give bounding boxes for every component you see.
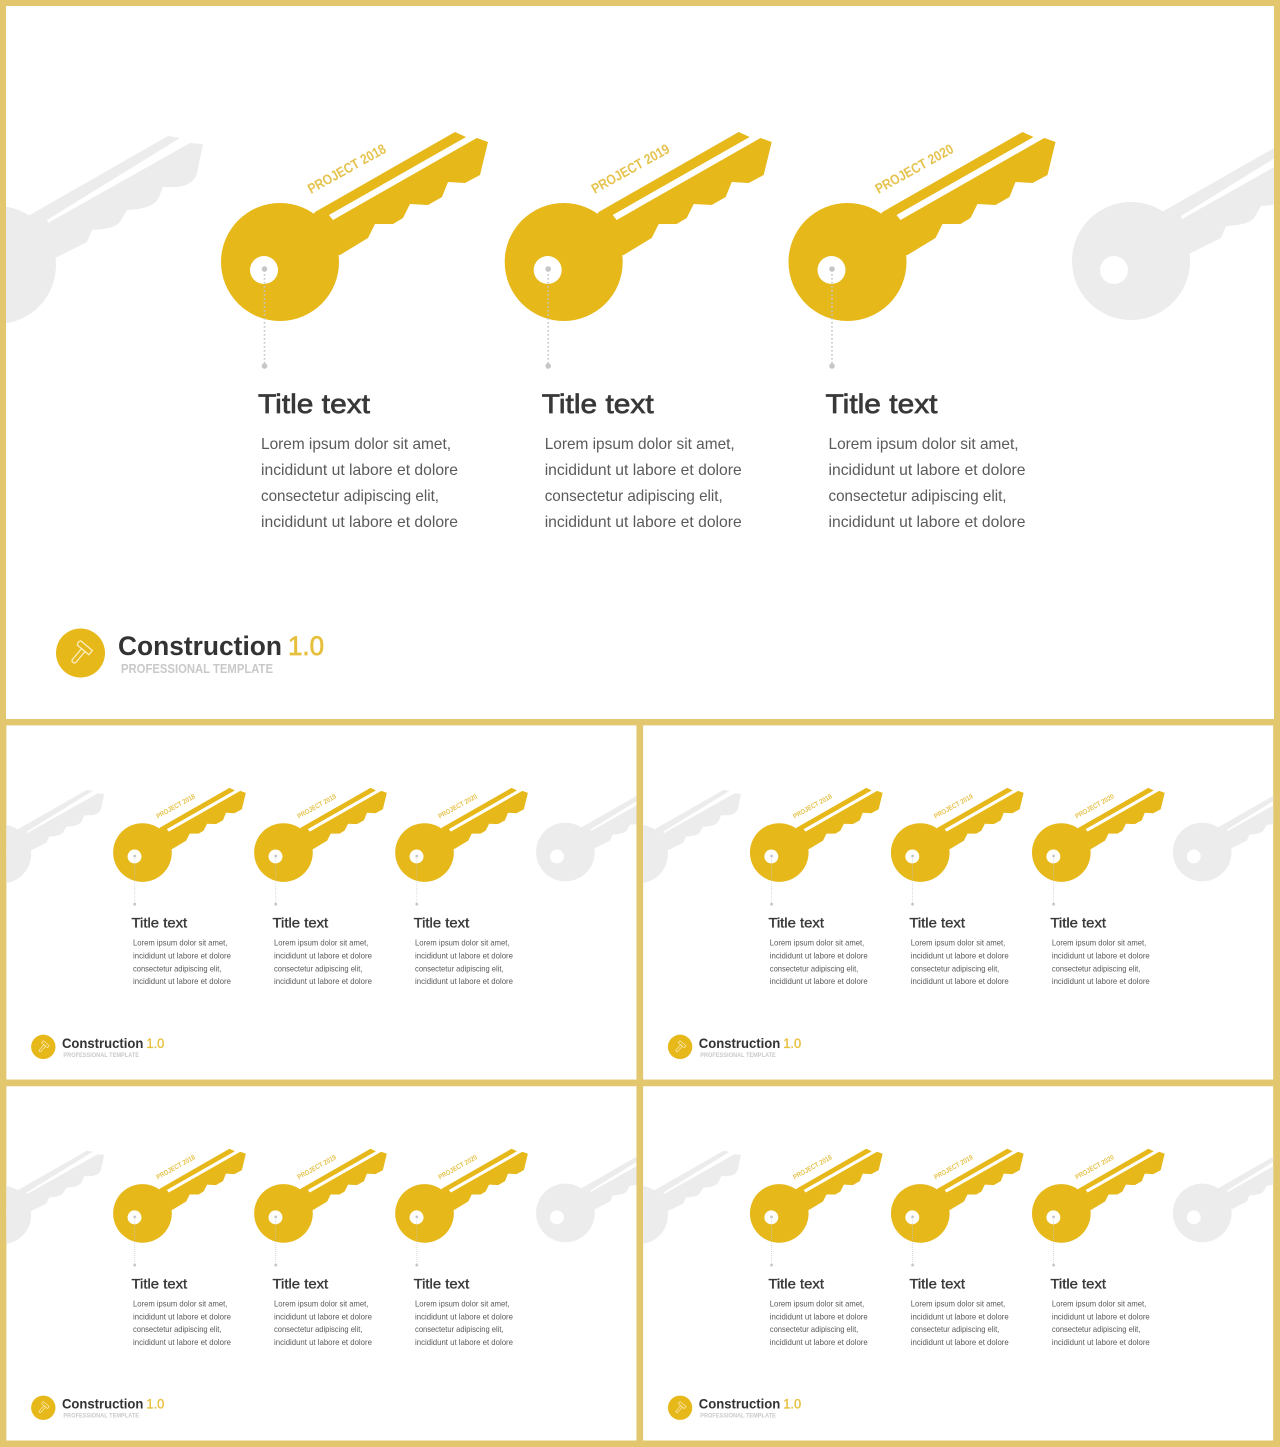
- column: project 2018: Title text: [768, 1276, 824, 1291]
- logo: construction 1.0: Construction: [699, 1397, 780, 1412]
- logo: construction 1.0: 1.0: [288, 631, 324, 661]
- column: project 2018: incididunt ut labore et dolore: [770, 1338, 868, 1347]
- column: project 2020: [1032, 1149, 1165, 1347]
- column: project 2020: Title text: [826, 389, 938, 419]
- column: project 2019: PROJECT 2019: [933, 1154, 975, 1181]
- column: project 2020: incididunt ut labore et dolore: [415, 1338, 514, 1347]
- column: project 2020: incididunt ut labore et dolore: [828, 462, 1026, 479]
- icon: grey key right: [1072, 148, 1274, 320]
- column: project 2020: PROJECT 2020: [1074, 793, 1116, 820]
- column: project 2020: consectetur adipiscing elit,: [415, 1325, 504, 1334]
- column: project 2019: incididunt ut labore et dolore: [274, 977, 372, 986]
- column: project 2019: Title text: [273, 1276, 328, 1291]
- column: project 2020: consectetur adipiscing elit,: [1052, 964, 1140, 973]
- panel: thumbnail top right: [609, 725, 1280, 1080]
- column: project 2019: incididunt ut labore et dolore: [911, 951, 1009, 960]
- logo: construction 1.0: [56, 628, 324, 678]
- column: project 2018: incididunt ut labore et dolore: [133, 1312, 231, 1321]
- icon: grey key left: [0, 1151, 104, 1244]
- logo: construction 1.0: PROFESSIONAL TEMPLATE: [63, 1052, 139, 1059]
- column: project 2019: [254, 1149, 387, 1347]
- column: project 2019: Lorem ipsum dolor sit amet,: [911, 938, 1005, 947]
- logo: construction 1.0: 1.0: [783, 1397, 801, 1412]
- column: project 2020: incididunt ut labore et dolore: [415, 1312, 514, 1321]
- column: project 2020: consectetur adipiscing elit,: [415, 964, 504, 973]
- column: project 2020: Lorem ipsum dolor sit amet,: [1052, 1299, 1146, 1308]
- column: project 2020: Title text: [1050, 916, 1106, 931]
- logo: construction 1.0: 1.0: [146, 1397, 164, 1412]
- column: project 2020: incididunt ut labore et dolore: [1052, 1312, 1150, 1321]
- column: project 2019: incididunt ut labore et dolore: [911, 1312, 1009, 1321]
- panel: thumbnail bottom left: [0, 1086, 668, 1441]
- logo: construction 1.0: PROFESSIONAL TEMPLATE: [121, 662, 273, 676]
- column: project 2020: [395, 788, 528, 986]
- column: project 2019: consectetur adipiscing elit,: [274, 1325, 362, 1334]
- icon: grey key left: [643, 790, 741, 883]
- logo: construction 1.0: 1.0: [783, 1036, 801, 1051]
- column: project 2019: incididunt ut labore et dolore: [545, 462, 742, 479]
- logo: construction 1.0: 1.0: [146, 1036, 164, 1051]
- column: project 2018: Lorem ipsum dolor sit amet,: [261, 436, 451, 453]
- icon: grey key right: [536, 796, 636, 882]
- column: project 2018: Lorem ipsum dolor sit amet,: [133, 938, 227, 947]
- column: project 2020: PROJECT 2020: [437, 1154, 479, 1181]
- column: project 2018: [221, 132, 488, 531]
- column: project 2020: consectetur adipiscing elit,: [1052, 1325, 1140, 1334]
- column: project 2020: Lorem ipsum dolor sit amet,: [415, 1299, 509, 1308]
- column: project 2020: [1032, 788, 1165, 986]
- logo: construction 1.0: [668, 1396, 801, 1420]
- logo: construction 1.0: PROFESSIONAL TEMPLATE: [700, 1052, 776, 1059]
- logo: construction 1.0: Construction: [699, 1036, 780, 1051]
- icon: grey key right: [536, 1157, 636, 1242]
- column: project 2020: incididunt ut labore et dolore: [415, 977, 514, 986]
- column: project 2018: incididunt ut labore et dolore: [770, 977, 868, 986]
- logo: construction 1.0: PROFESSIONAL TEMPLATE: [63, 1413, 139, 1420]
- column: project 2018: incididunt ut labore et dolore: [133, 977, 231, 986]
- column: project 2019: Lorem ipsum dolor sit amet,: [274, 938, 368, 947]
- column: project 2019: Title text: [909, 1276, 965, 1291]
- column: project 2018: [750, 1149, 883, 1347]
- column: project 2020: [395, 1149, 528, 1347]
- logo: construction 1.0: [31, 1396, 164, 1420]
- column: project 2019: incididunt ut labore et dolore: [274, 1312, 372, 1321]
- column: project 2019: consectetur adipiscing elit,: [911, 964, 999, 973]
- column: project 2018: incididunt ut labore et dolore: [770, 951, 868, 960]
- column: project 2018: incididunt ut labore et dolore: [770, 1312, 868, 1321]
- column: project 2018: PROJECT 2018: [305, 140, 389, 197]
- column: project 2020: incididunt ut labore et dolore: [1052, 1338, 1150, 1347]
- icon: grey key left: [643, 1151, 741, 1244]
- column: project 2019: incididunt ut labore et dolore: [545, 514, 742, 531]
- column: project 2018: incididunt ut labore et dolore: [261, 462, 458, 479]
- column: project 2018: Lorem ipsum dolor sit amet,: [133, 1299, 227, 1308]
- logo: construction 1.0: [31, 1035, 164, 1059]
- column: project 2018: PROJECT 2018: [792, 1154, 834, 1181]
- column: project 2018: Lorem ipsum dolor sit amet,: [770, 938, 864, 947]
- column: project 2019: [891, 788, 1024, 986]
- column: project 2020: Title text: [1050, 1276, 1106, 1291]
- column: project 2019: Title text: [273, 916, 328, 931]
- column: project 2019: PROJECT 2019: [296, 793, 338, 820]
- column: project 2019: PROJECT 2019: [296, 1154, 338, 1181]
- column: project 2019: [505, 132, 772, 531]
- column: project 2019: Lorem ipsum dolor sit amet,: [274, 1299, 368, 1308]
- column: project 2020: incididunt ut labore et dolore: [1052, 977, 1150, 986]
- column: project 2020: consectetur adipiscing elit,: [828, 488, 1006, 505]
- column: project 2018: consectetur adipiscing elit,: [770, 964, 858, 973]
- column: project 2019: Title text: [542, 389, 654, 419]
- column: project 2018: [113, 788, 246, 986]
- column: project 2020: Lorem ipsum dolor sit amet,: [1052, 938, 1146, 947]
- logo: construction 1.0: Construction: [118, 631, 282, 661]
- icon: grey key right: [1173, 1156, 1274, 1242]
- column: project 2018: Title text: [132, 916, 187, 931]
- column: project 2018: PROJECT 2018: [792, 793, 834, 820]
- column: project 2018: incididunt ut labore et dolore: [133, 1338, 231, 1347]
- panel: thumbnail bottom right: [609, 1086, 1280, 1441]
- column: project 2018: Title text: [768, 916, 824, 931]
- logo: construction 1.0: [668, 1035, 801, 1059]
- column: project 2019: consectetur adipiscing elit,: [545, 488, 723, 505]
- panel: thumbnail top left: [0, 725, 668, 1080]
- column: project 2019: PROJECT 2019: [588, 140, 672, 197]
- column: project 2020: PROJECT 2020: [1074, 1154, 1116, 1181]
- column: project 2020: Title text: [414, 916, 470, 931]
- column: project 2020: Title text: [414, 1276, 470, 1291]
- column: project 2020: incididunt ut labore et dolore: [1052, 951, 1150, 960]
- icon: grey key right: [1173, 796, 1274, 882]
- column: project 2018: consectetur adipiscing elit,: [770, 1325, 858, 1334]
- column: project 2020: [788, 132, 1056, 531]
- column: project 2020: PROJECT 2020: [872, 140, 956, 197]
- column: project 2019: incididunt ut labore et dolore: [274, 1338, 372, 1347]
- logo: construction 1.0: Construction: [62, 1036, 143, 1051]
- column: project 2018: consectetur adipiscing elit,: [261, 488, 439, 505]
- logo: construction 1.0: PROFESSIONAL TEMPLATE: [700, 1413, 776, 1420]
- column: project 2018: [750, 788, 883, 986]
- column: project 2018: incididunt ut labore et dolore: [261, 514, 458, 531]
- column: project 2020: Lorem ipsum dolor sit amet,: [828, 436, 1018, 453]
- column: project 2019: [254, 788, 387, 986]
- logo: construction 1.0: Construction: [62, 1397, 143, 1412]
- column: project 2018: PROJECT 2018: [155, 1154, 197, 1181]
- column: project 2020: Lorem ipsum dolor sit amet,: [415, 938, 509, 947]
- column: project 2018: PROJECT 2018: [155, 793, 197, 820]
- column: project 2018: Title text: [132, 1276, 187, 1291]
- column: project 2019: incididunt ut labore et dolore: [274, 951, 372, 960]
- column: project 2019: Title text: [909, 916, 965, 931]
- column: project 2019: consectetur adipiscing elit,: [274, 964, 362, 973]
- column: project 2019: consectetur adipiscing elit,: [911, 1325, 999, 1334]
- column: project 2018: consectetur adipiscing elit,: [133, 1325, 221, 1334]
- column: project 2019: PROJECT 2019: [933, 793, 975, 820]
- column: project 2019: incididunt ut labore et dolore: [911, 977, 1009, 986]
- icon: grey key left: [0, 790, 104, 883]
- column: project 2018: incididunt ut labore et dolore: [133, 951, 231, 960]
- column: project 2018: Title text: [258, 389, 371, 419]
- column: project 2018: Lorem ipsum dolor sit amet,: [770, 1299, 864, 1308]
- column: project 2019: Lorem ipsum dolor sit amet,: [911, 1299, 1005, 1308]
- icon: grey key left: [0, 136, 203, 324]
- column: project 2018: [113, 1149, 246, 1347]
- column: project 2019: incididunt ut labore et dolore: [911, 1338, 1009, 1347]
- column: project 2020: incididunt ut labore et dolore: [415, 951, 514, 960]
- column: project 2018: consectetur adipiscing elit,: [133, 964, 221, 973]
- column: project 2019: Lorem ipsum dolor sit amet,: [545, 436, 735, 453]
- column: project 2020: incididunt ut labore et dolore: [828, 514, 1026, 531]
- panel: main slide: [0, 6, 1280, 719]
- column: project 2020: PROJECT 2020: [437, 793, 479, 820]
- column: project 2019: [891, 1149, 1024, 1347]
